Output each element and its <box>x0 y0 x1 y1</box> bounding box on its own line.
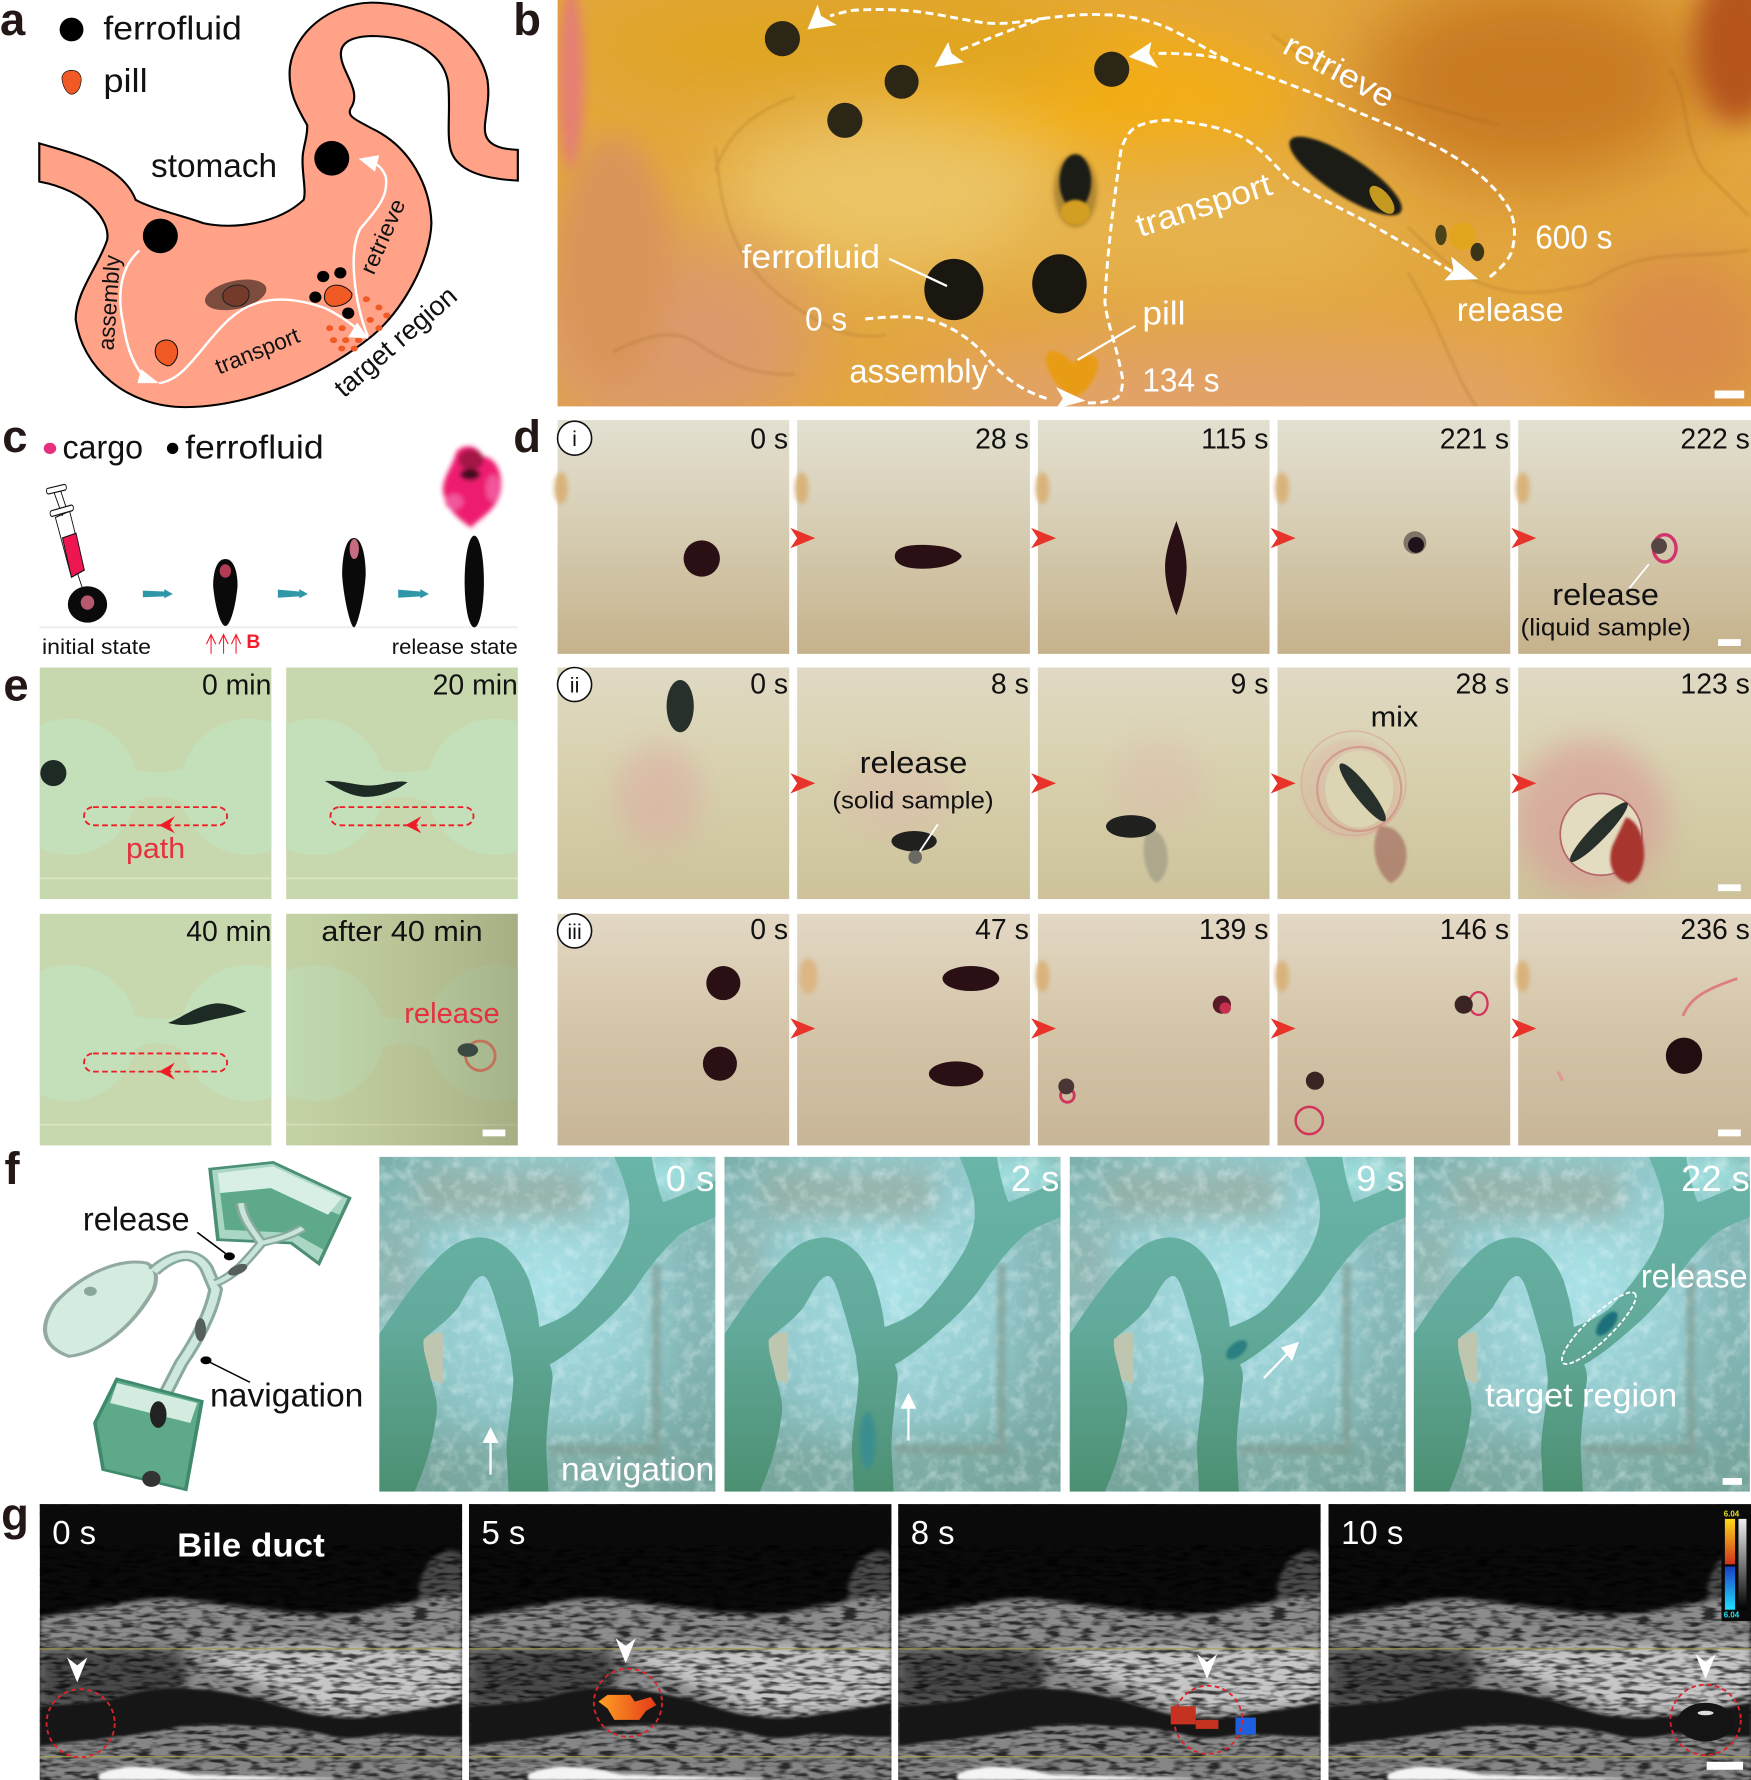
dashed paths <box>830 9 1514 403</box>
legend cargo and ferrofluid: ferrofluid <box>185 429 324 466</box>
photo 22 s: release <box>1641 1257 1748 1294</box>
label stomach: stomach <box>151 147 277 184</box>
label retrieve: retrieve <box>354 195 410 278</box>
cell iii 47 s: 47 s <box>975 914 1029 946</box>
cargo cloud <box>443 446 501 528</box>
photo 0 min <box>1 668 317 899</box>
photo after 40 min: after 40 min <box>321 916 483 948</box>
row ii <box>558 668 1751 899</box>
label navigation: navigation <box>210 1377 363 1414</box>
label assembly: assembly <box>93 254 125 351</box>
ultrasound 5 s <box>469 1504 891 1780</box>
panel a: stomach schematic <box>0 0 518 407</box>
ferrofluid droplets <box>765 21 1129 320</box>
droplet sequence <box>39 484 518 654</box>
photo 40 min: 40 min <box>186 916 271 948</box>
b labels <box>742 26 1612 399</box>
cell ii 9 s <box>1038 668 1270 899</box>
row i <box>554 420 1751 654</box>
cell ii 8 s: 8 s <box>991 669 1029 701</box>
panel b: in-vivo stomach photo <box>516 0 1751 406</box>
cell ii 9 s: 9 s <box>1231 669 1268 701</box>
cell i 0 s: 0 s <box>750 423 788 455</box>
cell ii 8 s <box>797 668 1030 899</box>
label release: release <box>83 1201 190 1238</box>
cell iii 236 s: 236 s <box>1680 914 1750 946</box>
cell ii 8 s: (solid sample) <box>832 787 994 814</box>
scale bar b <box>1715 391 1744 398</box>
cell i 0 s <box>554 420 789 654</box>
label release state: release state <box>392 634 518 659</box>
photo 22 s: target region <box>1485 1377 1677 1414</box>
photo after 40 min: release <box>404 998 500 1030</box>
cell i 222 s: 222 s <box>1680 423 1750 455</box>
cell i 28 s: 28 s <box>975 423 1029 455</box>
label g: g <box>1 1489 29 1540</box>
stomach illustration <box>39 3 518 407</box>
label initial state: initial state <box>42 634 151 659</box>
cell i 28 s <box>795 420 1030 654</box>
b labels: pill <box>1142 295 1186 332</box>
photo background <box>558 0 1751 406</box>
leader lines <box>889 259 1136 360</box>
panel c: release schematic <box>2 411 518 659</box>
arrowheads <box>807 5 1478 409</box>
panel e: maze photos <box>1 659 563 1145</box>
legend: ferrofluid: ferrofluid <box>103 10 242 47</box>
photo 2 s: 2 s <box>1011 1158 1059 1199</box>
photo 9 s <box>1070 1157 1406 1492</box>
b labels: 600 s <box>1535 219 1612 256</box>
ultrasound 8 s <box>898 1504 1321 1780</box>
photo 20 min: 20 min <box>433 670 518 702</box>
cell iii 146 s <box>1275 914 1510 1145</box>
photo 40 min <box>1 914 317 1145</box>
photo 0 min: 0 min <box>202 670 271 702</box>
panel g: ultrasound <box>1 1489 1751 1780</box>
photo 22 s: 22 s <box>1681 1158 1750 1199</box>
b labels: retrieve <box>1278 26 1401 115</box>
cell iii 146 s: 146 s <box>1440 914 1509 946</box>
droplets with pill, transit <box>1054 124 1484 261</box>
cell ii 0 s: 0 s <box>750 669 788 701</box>
legend cargo and ferrofluid: cargo <box>62 429 143 466</box>
cell ii 0 s: ii <box>570 672 579 697</box>
cell iii 47 s <box>797 914 1030 1145</box>
photo 0 s: 0 s <box>666 1158 714 1199</box>
legend: pill: pill <box>103 62 148 99</box>
cell i 115 s <box>1036 420 1270 654</box>
cell iii 236 s <box>1516 914 1751 1145</box>
b labels: release <box>1457 291 1564 328</box>
photo 9 s: 9 s <box>1356 1158 1405 1199</box>
cell iii 0 s: 0 s <box>750 914 788 946</box>
colour bar <box>1721 1508 1751 1621</box>
cell iii 139 s <box>1036 914 1270 1145</box>
photo 22 s <box>1414 1157 1750 1492</box>
photo 0 min: path <box>126 833 185 865</box>
cell i 222 s: release <box>1552 578 1659 612</box>
b labels: transport <box>1131 165 1276 244</box>
cell i 221 s: 221 s <box>1440 423 1509 455</box>
pill <box>1046 351 1098 397</box>
b labels: 134 s <box>1142 362 1220 399</box>
label e: e <box>3 659 29 710</box>
cell ii 28 s: 28 s <box>1455 669 1509 701</box>
b labels: ferrofluid <box>742 238 880 275</box>
ultrasound 5 s: 5 s <box>481 1514 525 1551</box>
label c: c <box>2 411 28 462</box>
ultrasound 0 s <box>40 1504 462 1780</box>
photo 0 s <box>379 1157 715 1492</box>
photo 20 min <box>248 668 563 899</box>
b labels: 0 s <box>805 300 847 337</box>
cell i 115 s: 115 s <box>1201 423 1268 455</box>
label transport: transport <box>211 322 304 379</box>
label target region: target region <box>328 280 463 403</box>
legend: pill <box>62 62 148 99</box>
ultrasound 10 s <box>1329 1504 1751 1780</box>
cell i 222 s <box>1516 420 1751 654</box>
cell i 0 s: i <box>572 426 577 451</box>
photo after 40 min <box>248 914 563 1145</box>
legend cargo and ferrofluid <box>44 429 324 466</box>
label d: d <box>513 411 541 462</box>
cell ii 28 s: mix <box>1371 702 1418 734</box>
cell ii 8 s: release <box>860 746 967 780</box>
panel f: vascular model <box>5 1143 1750 1492</box>
cell iii 0 s <box>558 914 789 1145</box>
ultrasound 10 s: 10 s <box>1341 1514 1403 1551</box>
cell iii 139 s: 139 s <box>1199 914 1268 946</box>
cell ii 123 s <box>1513 668 1751 899</box>
cell iii 0 s: iii <box>567 919 582 944</box>
ultrasound 0 s: Bile duct <box>177 1526 325 1563</box>
3D vessel model <box>45 1162 350 1490</box>
red transition arrows <box>790 528 1536 1039</box>
label B: B <box>246 632 260 653</box>
photo 0 s: navigation <box>561 1450 714 1487</box>
cell i 221 s <box>1275 420 1510 654</box>
row iii <box>558 914 1751 1145</box>
ultrasound 0 s: 0 s <box>52 1514 96 1551</box>
colour bar: 6.04 <box>1724 1510 1740 1519</box>
b labels: assembly <box>849 353 988 390</box>
cell ii 0 s <box>558 668 789 899</box>
cell ii 123 s: 123 s <box>1680 669 1750 701</box>
cell i 222 s: (liquid sample) <box>1520 615 1691 642</box>
cell ii 28 s <box>1277 668 1510 899</box>
photo 2 s <box>724 1157 1061 1492</box>
colour bar: 6.04 <box>1724 1611 1740 1620</box>
ultrasound 8 s: 8 s <box>911 1514 955 1551</box>
panel d: droplet release time series <box>513 411 1751 1145</box>
label f: f <box>5 1143 21 1194</box>
